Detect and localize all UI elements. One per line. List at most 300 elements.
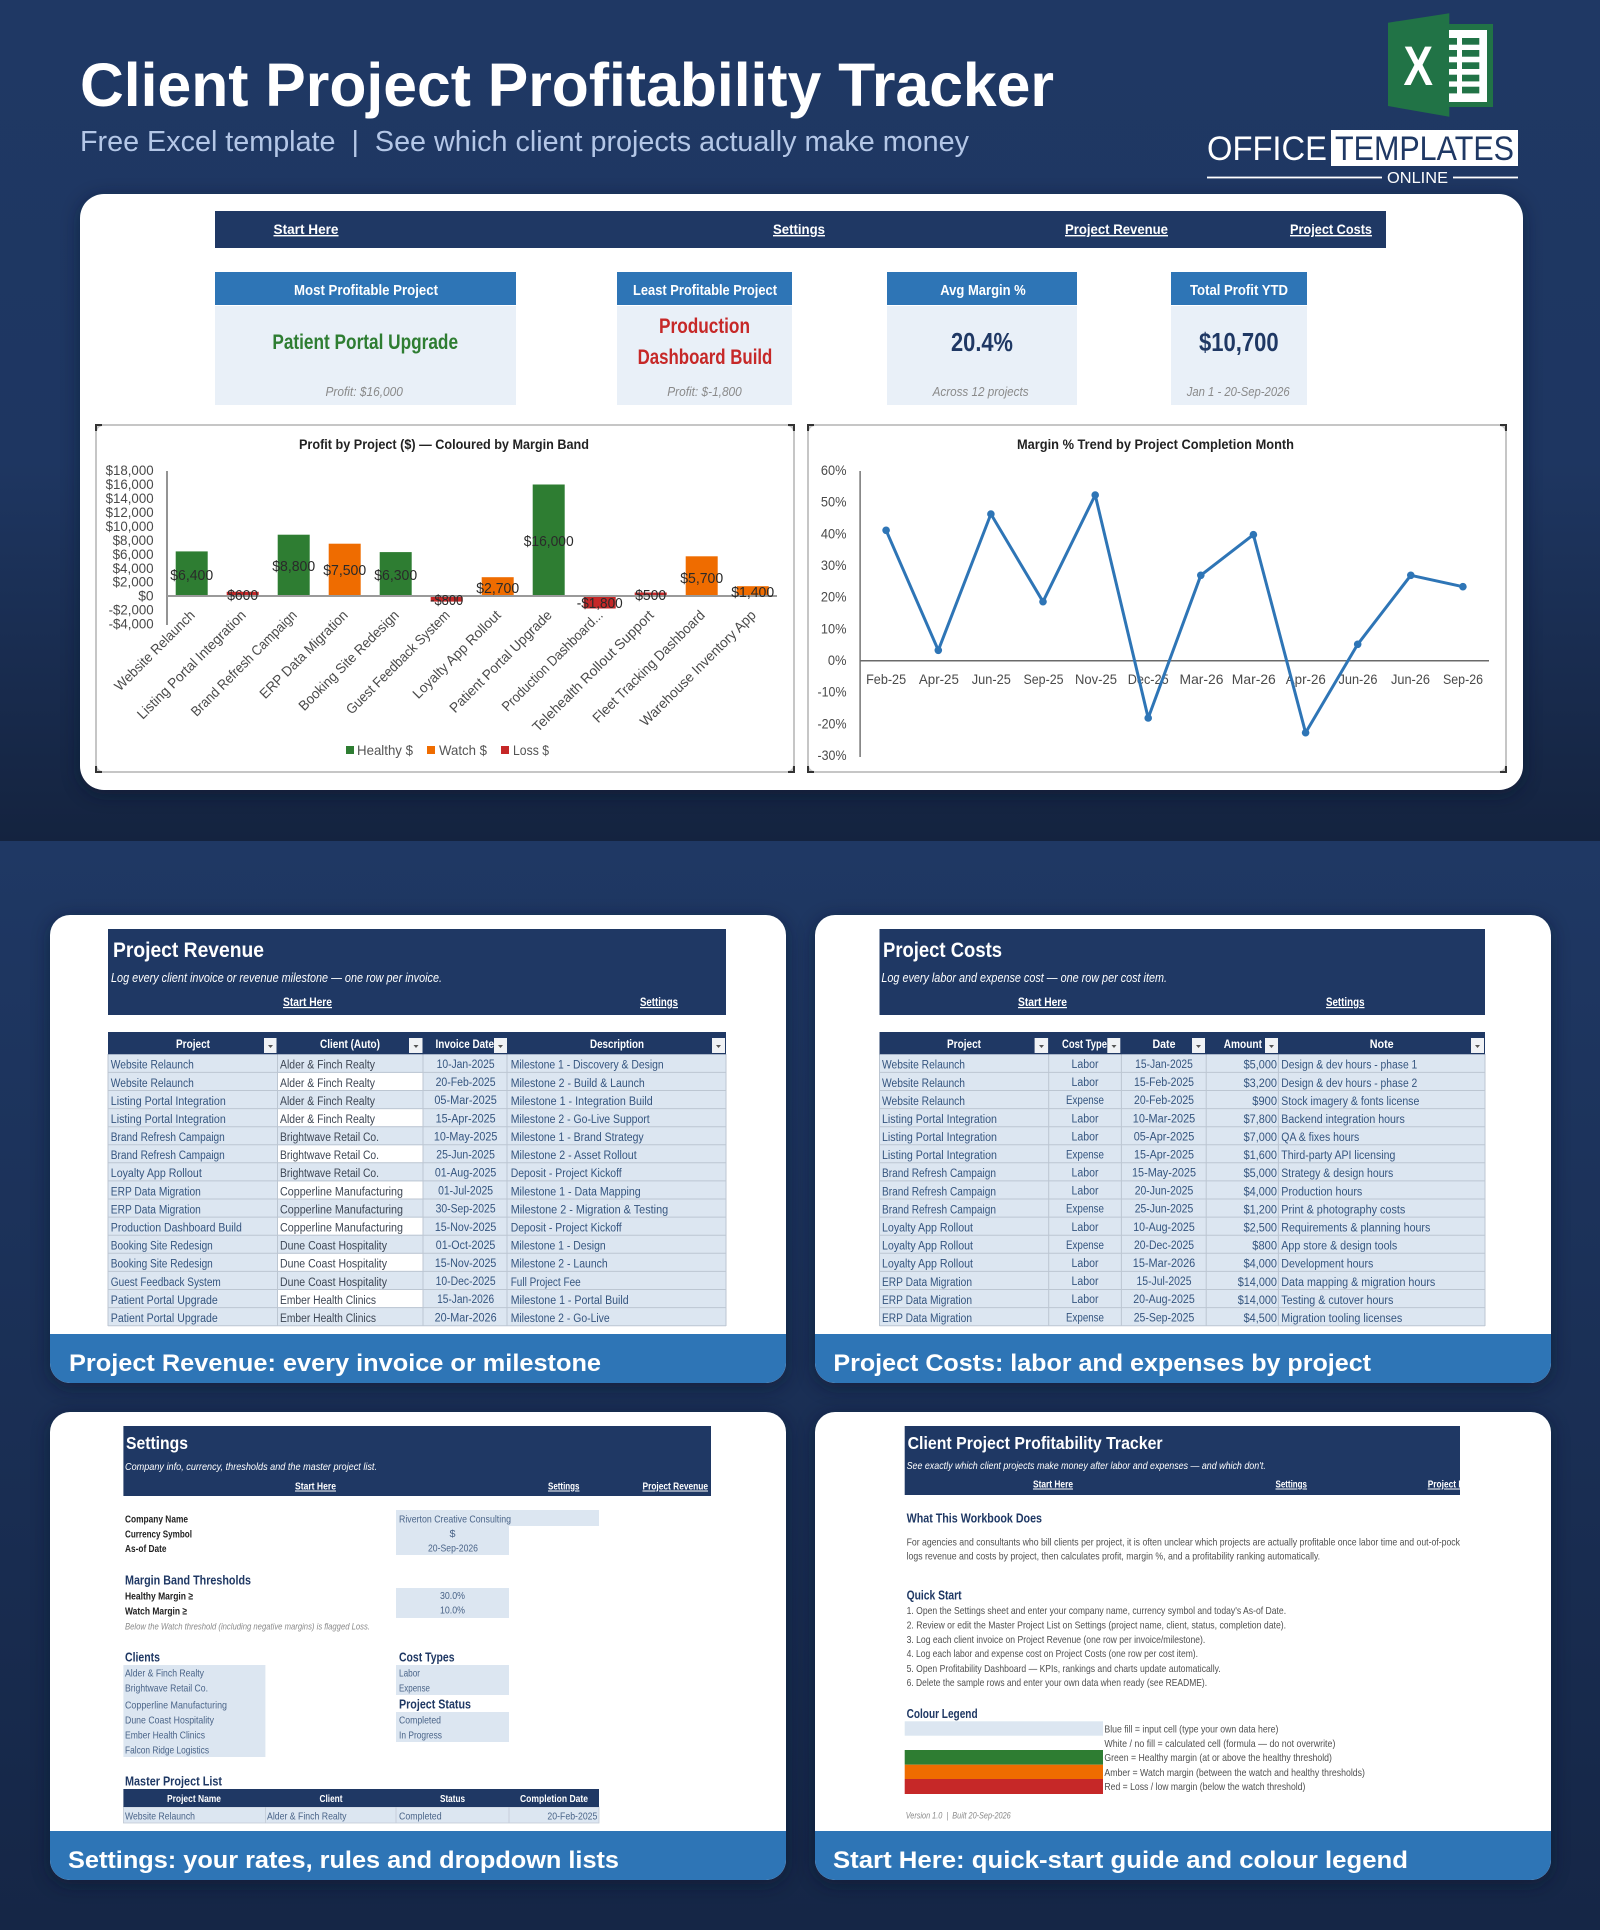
margin band thresholds: Below the Watch threshold (including negative margins) is flagged Loss. xyxy=(125,1622,370,1632)
cost type column: Labor xyxy=(1072,1222,1099,1234)
data labels: $6,400 xyxy=(170,568,213,584)
table header: Note xyxy=(1370,1039,1394,1051)
y axis labels: $16,000 xyxy=(106,476,154,492)
clients list: Alder & Finch Realty xyxy=(125,1668,205,1680)
amount column: $1,200 xyxy=(1244,1204,1277,1216)
category labels: Patient Portal Upgrade xyxy=(446,607,555,716)
date column: 15-Jul-2025 xyxy=(1136,1276,1192,1288)
line chart: margin trend xyxy=(808,425,1506,772)
description column xyxy=(511,1060,668,1325)
master project list: Completion Date xyxy=(520,1793,588,1805)
trend line xyxy=(886,495,1463,733)
chart legend: Healthy $ xyxy=(357,742,413,758)
kpi: most profitable project: Patient Portal Upgrade xyxy=(272,331,458,354)
what this workbook does: logs revenue and costs by project, then calculates profit, margin %, and a profitability ranking automatically. xyxy=(907,1550,1320,1562)
project column: Website Relaunch xyxy=(111,1060,194,1072)
project column: ERP Data Migration xyxy=(882,1295,972,1307)
y axis labels: $10,000 xyxy=(106,518,154,534)
x axis labels: Dec-25 xyxy=(1128,671,1169,687)
client column: Copperline Manufacturing xyxy=(280,1204,403,1216)
category labels: Website Relaunch xyxy=(111,607,198,694)
description column: Milestone 1 - Data Mapping xyxy=(511,1186,641,1198)
project column: Patient Portal Upgrade xyxy=(111,1295,218,1307)
margin band thresholds: Watch Margin ≥ xyxy=(125,1606,187,1618)
date column: 25-Jun-2025 xyxy=(1135,1204,1193,1216)
company settings xyxy=(125,1510,599,1555)
amount column: $14,000 xyxy=(1238,1277,1277,1289)
card shadow: project revenue xyxy=(50,919,786,1387)
sheet header: Company info, currency, thresholds and the master project list. xyxy=(125,1461,377,1473)
caption: settings: Settings: your rates, rules and dropdown lists xyxy=(68,1847,619,1874)
invoice date column: 15-Jan-2026 xyxy=(437,1294,494,1306)
logo: office templates online xyxy=(1207,130,1518,187)
project column: Loyalty App Rollout xyxy=(882,1241,974,1253)
sheet header: Start Here xyxy=(1033,1480,1073,1490)
note column: Design & dev hours - phase 2 xyxy=(1281,1078,1417,1090)
master project list: Website Relaunch xyxy=(125,1810,195,1822)
chart legend xyxy=(346,742,549,758)
amount column: $3,200 xyxy=(1244,1078,1277,1090)
y axis labels: 50% xyxy=(821,494,846,510)
data labels: $500 xyxy=(635,588,666,604)
x axis labels: Mar-26 xyxy=(1180,671,1224,687)
table header: Date xyxy=(1152,1039,1176,1051)
data labels: $2,700 xyxy=(476,581,519,597)
client column: Ember Health Clinics xyxy=(280,1295,376,1307)
description column: Full Project Fee xyxy=(511,1277,581,1289)
invoice date column: 15-Nov-2025 xyxy=(435,1258,496,1270)
company settings: Currency Symbol xyxy=(125,1528,192,1540)
cost types list: Labor xyxy=(399,1668,420,1680)
cost type column: Labor xyxy=(1072,1186,1099,1198)
y axis labels: $0 xyxy=(138,588,154,604)
sheet header xyxy=(108,929,726,1015)
title: Client Project Profitability Tracker xyxy=(80,51,1054,119)
logo: office templates online: ONLINE xyxy=(1387,170,1448,187)
description column: Milestone 1 - Design xyxy=(511,1241,606,1253)
note column: Design & dev hours - phase 1 xyxy=(1281,1060,1417,1072)
panel: project revenue xyxy=(50,915,786,1383)
description column: Deposit - Project Kickoff xyxy=(511,1168,622,1180)
y axis labels: -10% xyxy=(818,684,846,700)
caption: project revenue xyxy=(50,1334,786,1383)
navigation bar xyxy=(215,211,1386,248)
table header: Cost Type xyxy=(1062,1039,1107,1051)
y axis labels xyxy=(106,462,154,632)
project status list: Completed xyxy=(399,1714,441,1726)
note column: QA & fixes hours xyxy=(1281,1132,1360,1144)
clients list: Clients xyxy=(125,1650,160,1664)
project status list xyxy=(396,1696,509,1742)
master project list: Alder & Finch Realty xyxy=(267,1810,347,1822)
data labels: $16,000 xyxy=(524,534,574,550)
caption: settings xyxy=(50,1831,786,1880)
cost type column: Expense xyxy=(1066,1240,1104,1252)
kpi: most profitable project xyxy=(215,272,516,405)
version note: Version 1.0 | Built 20-Sep-2026 xyxy=(906,1810,1011,1822)
description column: Milestone 2 - Launch xyxy=(511,1259,608,1271)
x axis labels: Feb-25 xyxy=(866,671,906,687)
sheet header: Settings xyxy=(1276,1480,1307,1490)
quick start: 6. Delete the sample rows and enter your own data when ready (see README). xyxy=(907,1677,1207,1689)
client column: Dune Coast Hospitality xyxy=(280,1277,387,1289)
colour legend: Green = Healthy margin (at or above the healthy threshold) xyxy=(1104,1752,1332,1764)
kpi: least profitable project: Production xyxy=(659,315,750,338)
cost types list: Cost Types xyxy=(399,1650,454,1664)
date column: 05-Apr-2025 xyxy=(1134,1131,1194,1143)
client column: Ember Health Clinics xyxy=(280,1313,376,1325)
category labels: Telehealth Rollout Support xyxy=(529,607,657,735)
chart title: Profit by Project ($) — Coloured by Margin Band xyxy=(299,437,589,452)
note column: Backend integration hours xyxy=(1281,1114,1405,1126)
kpi: least profitable project: Dashboard Build xyxy=(638,346,772,369)
project column: Website Relaunch xyxy=(882,1096,965,1108)
cost type column: Expense xyxy=(1066,1204,1104,1216)
date column: 25-Sep-2025 xyxy=(1134,1312,1194,1324)
data labels: $8,800 xyxy=(272,559,315,575)
data labels: -$1,800 xyxy=(577,596,623,612)
what this workbook does: For agencies and consultants who bill clients per project, it is often unclear which projects are actually profitable once labor time and out-of-pock xyxy=(907,1536,1461,1548)
company settings: As-of Date xyxy=(125,1543,167,1555)
x axis labels: Jun-26 xyxy=(1391,671,1430,687)
y axis labels: $12,000 xyxy=(106,504,154,520)
master project list: Project Name xyxy=(167,1793,221,1805)
quick start xyxy=(907,1588,1286,1689)
sheet header xyxy=(880,929,1485,1015)
y axis labels: -$4,000 xyxy=(109,616,154,632)
card shadow: dashboard xyxy=(80,198,1523,794)
project column: ERP Data Migration xyxy=(882,1277,972,1289)
category labels: ERP Data Migration xyxy=(256,607,351,702)
project column xyxy=(111,1060,242,1325)
project column: ERP Data Migration xyxy=(882,1313,972,1325)
margin band thresholds: 30.0% xyxy=(440,1590,465,1602)
description column: Milestone 1 - Integration Build xyxy=(511,1096,653,1108)
navigation bar: Project Costs xyxy=(1290,221,1372,237)
panel: dashboard xyxy=(80,194,1523,790)
category labels: Fleet Tracking Dashboard xyxy=(589,607,708,726)
y axis labels: $6,000 xyxy=(113,546,154,562)
amount column: $5,000 xyxy=(1244,1060,1277,1072)
quick start: Quick Start xyxy=(907,1588,962,1602)
description column: Milestone 2 - Build & Launch xyxy=(511,1078,645,1090)
kpi: avg margin: Across 12 projects xyxy=(932,384,1029,399)
colour legend: White / no fill = calculated cell (formula — do not overwrite) xyxy=(1104,1738,1335,1750)
note column: Development hours xyxy=(1281,1259,1374,1271)
amount column: $4,500 xyxy=(1244,1313,1277,1325)
panel: start here xyxy=(815,1412,1551,1880)
project column: Website Relaunch xyxy=(882,1060,965,1072)
sheet header: Project Costs xyxy=(883,939,1002,962)
category labels: Production Dashboard... xyxy=(498,607,606,714)
date column: 15-May-2025 xyxy=(1132,1168,1196,1180)
caption: project costs: Project Costs: labor and expenses by project xyxy=(833,1350,1371,1377)
amount column: $4,000 xyxy=(1244,1186,1277,1198)
caption: start here: Start Here: quick-start guide and colour legend xyxy=(833,1847,1408,1874)
master project list: Completed xyxy=(399,1810,442,1822)
company settings: Company Name xyxy=(125,1514,188,1526)
date column: 15-Mar-2026 xyxy=(1133,1258,1195,1270)
data labels xyxy=(170,534,774,612)
data labels: $6,300 xyxy=(374,568,417,584)
table header: Client (Auto) xyxy=(320,1039,380,1051)
project column: Listing Portal Integration xyxy=(882,1114,997,1126)
project column: Listing Portal Integration xyxy=(111,1096,226,1108)
project column: Brand Refresh Campaign xyxy=(882,1186,996,1198)
invoice date column xyxy=(434,1059,497,1324)
note column: Testing & cutover hours xyxy=(1281,1295,1394,1307)
invoice date column: 05-Mar-2025 xyxy=(434,1095,497,1107)
table: costs xyxy=(880,1032,1485,1326)
y axis labels: -30% xyxy=(818,747,846,763)
quick start: 3. Log each client invoice on Project Revenue (one row per invoice/milestone). xyxy=(907,1634,1205,1646)
company settings: Riverton Creative Consulting xyxy=(399,1514,511,1526)
sheet header: Start Here xyxy=(295,1482,336,1492)
sheet header: Settings xyxy=(548,1482,580,1492)
x axis labels xyxy=(866,671,1483,687)
cost type column: Labor xyxy=(1072,1276,1099,1288)
caption: start here xyxy=(815,1831,1551,1880)
client column: Brightwave Retail Co. xyxy=(280,1150,379,1162)
client column: Alder & Finch Realty xyxy=(280,1114,375,1126)
client column: Brightwave Retail Co. xyxy=(280,1132,379,1144)
master project list xyxy=(123,1774,599,1823)
clients list: Copperline Manufacturing xyxy=(125,1700,227,1712)
kpi: total profit ytd xyxy=(1171,272,1307,405)
table header: Project xyxy=(176,1039,210,1051)
project column: Website Relaunch xyxy=(111,1078,194,1090)
margin band thresholds: Healthy Margin ≥ xyxy=(125,1590,193,1602)
amount column xyxy=(1238,1060,1277,1325)
project column: Patient Portal Upgrade xyxy=(111,1313,218,1325)
invoice date column: 15-Apr-2025 xyxy=(436,1113,496,1125)
invoice date column: 01-Oct-2025 xyxy=(436,1240,495,1252)
note column xyxy=(1281,1060,1436,1325)
sheet header: Settings xyxy=(126,1433,188,1453)
x axis labels: Nov-25 xyxy=(1075,671,1117,687)
y axis labels: 30% xyxy=(821,557,846,573)
cost type column: Labor xyxy=(1072,1077,1099,1089)
invoice date column: 10-Dec-2025 xyxy=(436,1276,496,1288)
invoice date column: 10-May-2025 xyxy=(434,1131,497,1143)
project column: Guest Feedback System xyxy=(111,1277,221,1289)
project column: Listing Portal Integration xyxy=(111,1114,226,1126)
quick start: 1. Open the Settings sheet and enter your company name, currency symbol and today's As-of Date. xyxy=(907,1605,1286,1617)
y axis labels: $18,000 xyxy=(106,462,154,478)
quick start: 4. Log each labor and expense cost on Project Costs (one row per cost item). xyxy=(907,1648,1198,1660)
company settings: 20-Sep-2026 xyxy=(428,1542,478,1554)
kpi: total profit ytd: $10,700 xyxy=(1199,327,1279,357)
note column: App store & design tools xyxy=(1281,1241,1398,1253)
project column: Brand Refresh Campaign xyxy=(111,1132,225,1144)
panel: settings xyxy=(50,1412,786,1880)
y axis labels: $4,000 xyxy=(113,560,154,576)
description column: Deposit - Project Kickoff xyxy=(511,1222,622,1234)
project column: ERP Data Migration xyxy=(111,1186,201,1198)
clients list: Falcon Ridge Logistics xyxy=(125,1744,209,1756)
invoice date column: 20-Feb-2025 xyxy=(436,1077,496,1089)
x axis labels: Sep-25 xyxy=(1024,671,1064,687)
master project list: 20-Feb-2025 xyxy=(547,1810,598,1822)
x axis labels: Sep-26 xyxy=(1443,671,1483,687)
project column: Website Relaunch xyxy=(882,1078,965,1090)
sheet header xyxy=(123,1426,711,1496)
client column: Alder & Finch Realty xyxy=(280,1096,375,1108)
colour legend: Red = Loss / low margin (below the watch threshold) xyxy=(1104,1781,1305,1793)
sheet header: Client Project Profitability Tracker xyxy=(908,1433,1163,1453)
project column: Production Dashboard Build xyxy=(111,1222,242,1234)
y axis labels: $2,000 xyxy=(113,574,154,590)
y axis labels: 10% xyxy=(821,620,846,636)
x axis labels: Apr-26 xyxy=(1286,671,1326,687)
y axis labels xyxy=(818,462,846,763)
master project list: Master Project List xyxy=(125,1774,223,1788)
colour legend: Blue fill = input cell (type your own data here) xyxy=(1104,1724,1278,1736)
amount column: $2,500 xyxy=(1244,1222,1277,1234)
date column: 15-Jan-2025 xyxy=(1135,1059,1193,1071)
cost type column: Labor xyxy=(1072,1168,1099,1180)
sheet header: Log every labor and expense cost — one row per cost item. xyxy=(881,971,1167,985)
project status list: In Progress xyxy=(399,1730,442,1742)
project column: Loyalty App Rollout xyxy=(882,1222,974,1234)
card shadow: start here xyxy=(815,1416,1551,1884)
project column: Loyalty App Rollout xyxy=(882,1259,974,1271)
caption: project costs xyxy=(815,1334,1551,1383)
y axis labels: -20% xyxy=(818,715,846,731)
project column: Listing Portal Integration xyxy=(882,1150,997,1162)
y axis labels: -$2,000 xyxy=(109,602,154,618)
client column: Dune Coast Hospitality xyxy=(280,1241,387,1253)
date column: 20-Aug-2025 xyxy=(1133,1294,1195,1306)
description column: Milestone 1 - Portal Build xyxy=(511,1295,629,1307)
caption: project revenue: Project Revenue: every invoice or milestone xyxy=(69,1350,601,1377)
project column xyxy=(882,1060,997,1325)
table header: Project xyxy=(947,1039,981,1051)
logo: office templates online: OFFICE xyxy=(1207,130,1327,168)
date column: 15-Feb-2025 xyxy=(1134,1077,1194,1089)
note column: Stock imagery & fonts license xyxy=(1281,1096,1419,1108)
colour legend: Amber = Watch margin (between the watch and healthy thresholds) xyxy=(1104,1767,1365,1779)
clients list xyxy=(123,1650,265,1757)
project column: Listing Portal Integration xyxy=(882,1132,997,1144)
table header: Amount xyxy=(1224,1039,1262,1051)
table header xyxy=(108,1032,726,1054)
data labels: $600 xyxy=(227,588,258,604)
axes xyxy=(859,471,1489,757)
logo: office templates online: TEMPLATES xyxy=(1335,130,1514,168)
description column: Milestone 2 - Asset Rollout xyxy=(511,1150,637,1162)
cost type column: Expense xyxy=(1066,1095,1104,1107)
sheet header: Project Revenue xyxy=(1428,1480,1494,1490)
margin band thresholds: Margin Band Thresholds xyxy=(125,1572,251,1588)
x axis labels: Mar-26 xyxy=(1232,671,1276,687)
invoice date column: 25-Jun-2025 xyxy=(436,1150,495,1162)
amount column: $900 xyxy=(1252,1096,1277,1108)
note column: Migration tooling licenses xyxy=(1281,1313,1403,1325)
category labels: Guest Feedback System xyxy=(343,607,453,717)
amount column: $1,600 xyxy=(1244,1150,1277,1162)
invoice date column: 20-Mar-2026 xyxy=(435,1312,497,1324)
amount column: $4,000 xyxy=(1244,1259,1277,1271)
icon: excel logo: X xyxy=(1404,34,1433,97)
date column xyxy=(1132,1059,1196,1324)
description column: Milestone 2 - Go-Live xyxy=(511,1313,610,1325)
project column: Loyalty App Rollout xyxy=(111,1168,203,1180)
chart legend: Loss $ xyxy=(513,742,549,758)
card shadow: settings xyxy=(50,1416,786,1884)
project column: Booking Site Redesign xyxy=(111,1259,213,1271)
clients list: Brightwave Retail Co. xyxy=(125,1682,208,1694)
y axis labels: 20% xyxy=(821,589,846,605)
kpi: avg margin xyxy=(887,272,1077,405)
x axis labels: Jun-26 xyxy=(1338,671,1378,687)
margin band thresholds: 10.0% xyxy=(440,1604,465,1616)
navigation bar: Settings xyxy=(773,221,825,237)
navigation bar: Start Here xyxy=(274,221,339,237)
project column: Brand Refresh Campaign xyxy=(111,1150,225,1162)
sheet header: Start Here xyxy=(283,995,332,1009)
date column: 20-Dec-2025 xyxy=(1134,1240,1194,1252)
x axis labels: Apr-25 xyxy=(919,671,959,687)
project column: ERP Data Migration xyxy=(111,1204,201,1216)
y axis labels: $8,000 xyxy=(113,532,154,548)
invoice date column: 01-Aug-2025 xyxy=(435,1168,496,1180)
note column: Requirements & planning hours xyxy=(1281,1222,1431,1234)
clients list: Ember Health Clinics xyxy=(125,1730,205,1742)
sheet header: Settings xyxy=(1326,995,1365,1009)
date column: 10-Mar-2025 xyxy=(1133,1113,1195,1125)
y axis labels: 40% xyxy=(821,525,846,541)
chart legend: Watch $ xyxy=(439,742,487,758)
sheet header: Project Revenue xyxy=(642,1482,708,1492)
sheet header: See exactly which client projects make money after labor and expenses — and which don't. xyxy=(907,1460,1266,1472)
company settings: $ xyxy=(450,1528,456,1540)
kpi: least profitable project xyxy=(617,272,792,405)
date column: 20-Feb-2025 xyxy=(1134,1095,1194,1107)
kpi: least profitable project: Profit: $-1,800 xyxy=(667,384,742,399)
category labels: Loyalty App Rollout xyxy=(409,607,504,702)
navigation bar: Project Revenue xyxy=(1065,221,1168,237)
bar chart: profit by project xyxy=(96,425,794,772)
project column: Booking Site Redesign xyxy=(111,1241,213,1253)
clients list: Dune Coast Hospitality xyxy=(125,1714,215,1726)
quick start: 5. Open Profitability Dashboard — KPIs, rankings and charts update automatically. xyxy=(907,1663,1221,1675)
axes xyxy=(166,471,777,625)
y axis labels: 60% xyxy=(821,462,846,478)
cost type column: Labor xyxy=(1072,1113,1099,1125)
trend markers xyxy=(882,491,1467,736)
cost type column: Labor xyxy=(1072,1258,1099,1270)
cost type column: Expense xyxy=(1066,1150,1104,1162)
category labels: Warehouse Inventory App xyxy=(636,607,759,729)
cost type column: Labor xyxy=(1072,1059,1099,1071)
sheet header: Project Revenue xyxy=(113,939,264,962)
description column: Milestone 2 - Migration & Testing xyxy=(511,1204,668,1216)
project status list: Project Status xyxy=(399,1696,471,1712)
background: top section xyxy=(0,0,1600,841)
category labels xyxy=(111,607,759,735)
sheet header: Settings xyxy=(640,995,678,1009)
y axis labels: 0% xyxy=(828,652,846,668)
cost type column: Labor xyxy=(1072,1131,1099,1143)
category labels: Listing Portal Integration xyxy=(134,607,249,722)
category labels: Brand Refresh Campaign xyxy=(187,607,300,719)
date column: 20-Jun-2025 xyxy=(1135,1186,1193,1198)
cost type column: Expense xyxy=(1066,1312,1104,1324)
note column: Print & photography costs xyxy=(1281,1204,1406,1216)
kpi: avg margin: 20.4% xyxy=(951,327,1013,357)
kpi: least profitable project: Least Profitable Project xyxy=(633,283,777,299)
